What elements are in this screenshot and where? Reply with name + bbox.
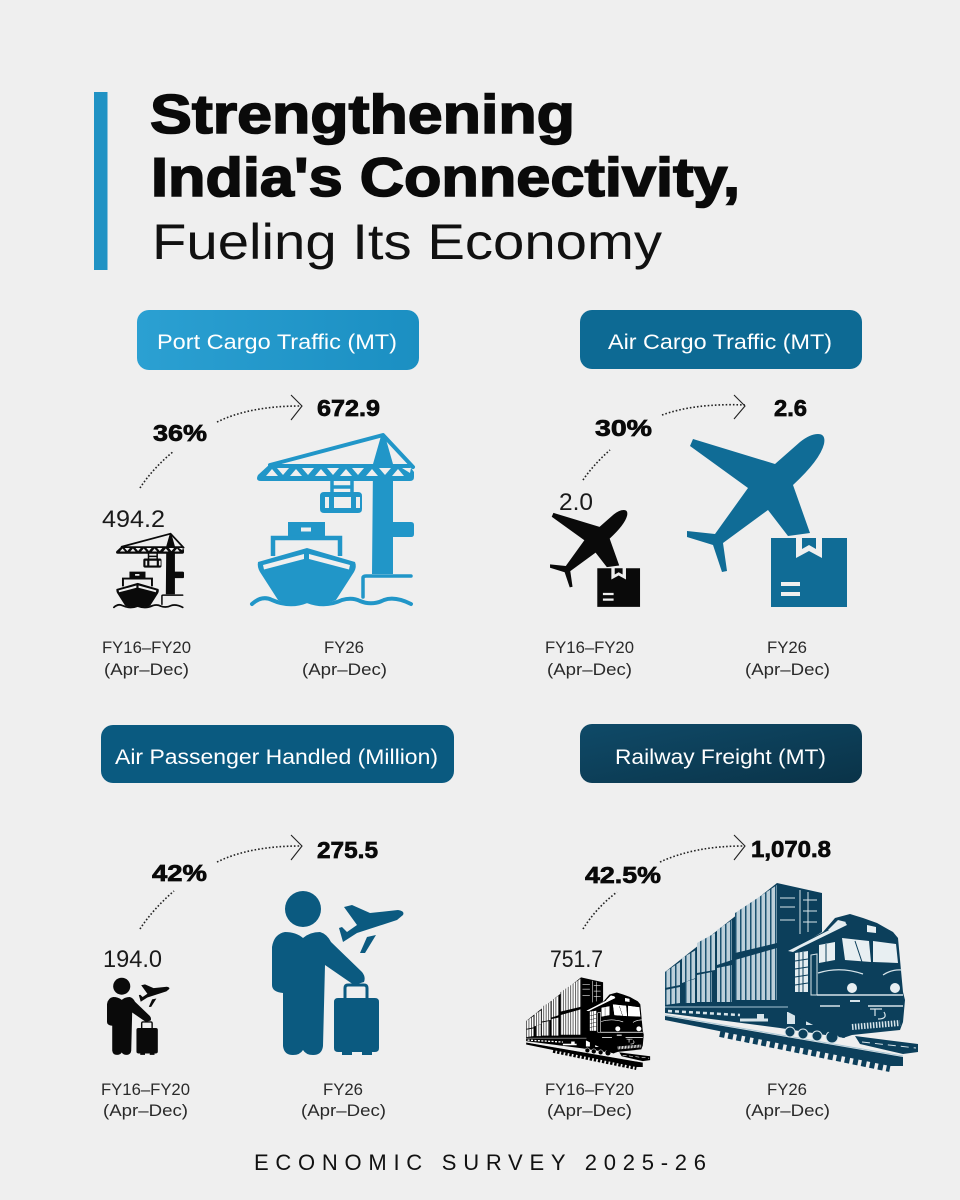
panel: air cargo traffic [545,310,862,679]
label: FY26: (Apr–Dec) [302,660,387,679]
label: FY26 [745,1080,830,1120]
label: FY16-FY20: FY16–FY20 [101,1080,190,1099]
heading pill: port cargo traffic: Port Cargo Traffic (MT) [157,331,397,354]
icon: small passenger [107,978,169,1055]
label: FY16-FY20: (Apr–Dec) [103,1101,188,1120]
title: Strengthening [150,83,575,145]
label: FY26 [301,1080,386,1120]
label: FY16-FY20: FY16–FY20 [545,638,634,657]
heading pill: air cargo traffic: Air Cargo Traffic (MT) [608,331,832,354]
title: Fueling Its Economy [152,214,662,270]
value: 1,070.8: 1,070.8 [751,836,831,862]
value: 2.0: 2.0 [559,489,593,516]
value: 194.0: 194.0 [103,946,162,973]
growth arrow: 42.5% [583,835,745,929]
icon: large crane and ship [252,434,414,604]
growth arrow: 30%: 30% [595,415,652,441]
label: FY26: FY26 [767,638,807,657]
label: FY26: FY26 [324,638,364,657]
label: FY16-FY20 [102,638,191,679]
label: FY26 [745,638,830,679]
growth arrow: 42%: 42% [152,860,207,886]
label: FY16-FY20: FY16–FY20 [545,1080,634,1099]
value: 672.9: 672.9 [317,395,380,421]
label: FY16-FY20: FY16–FY20 [102,638,191,657]
label: FY16-FY20: (Apr–Dec) [547,660,632,679]
label: FY26: FY26 [767,1080,807,1099]
value: 494.2: 494.2 [102,506,165,533]
label: FY26: (Apr–Dec) [301,1101,386,1120]
growth arrow: 36%: 36% [153,420,207,446]
label: FY16-FY20 [101,1080,190,1120]
heading pill: railway freight [580,724,862,783]
label: FY16-FY20: (Apr–Dec) [104,660,189,679]
icon: large plane with parcel [687,434,847,607]
icon: small freight train [526,977,650,1068]
label: FY26 [302,638,387,679]
value: 751.7: 751.7 [550,946,603,973]
icon: large freight train [665,883,918,1068]
panel: air passenger handled [101,725,454,1120]
label: FY16-FY20 [545,1080,634,1120]
growth arrow: 30% [583,395,745,480]
heading pill: air passenger handled: Air Passenger Handled (Million) [115,746,438,769]
footer source: ECONOMIC SURVEY 2025-26 [254,1150,706,1175]
panel: railway freight [526,724,918,1120]
label: FY26: FY26 [323,1080,363,1099]
icon: small plane with parcel [550,510,640,607]
value: 2.6: 2.6 [774,395,807,421]
label: FY16-FY20: (Apr–Dec) [547,1101,632,1120]
icon: large passenger [272,891,403,1055]
title [150,83,740,270]
title accent bar [94,92,108,270]
label: FY16-FY20 [545,638,634,679]
growth arrow: 42% [140,835,302,929]
heading pill: railway freight: Railway Freight (MT) [615,746,826,769]
label: FY26: (Apr–Dec) [745,1101,830,1120]
growth arrow: 36% [140,395,302,488]
value: 275.5: 275.5 [317,837,378,863]
title: India's Connectivity, [151,146,740,208]
growth arrow: 42.5%: 42.5% [585,862,661,888]
icon: small crane and ship [114,533,184,607]
heading pill: air passenger handled [101,725,454,783]
heading pill: port cargo traffic [137,310,419,370]
panel: port cargo traffic [102,310,419,679]
label: FY26: (Apr–Dec) [745,660,830,679]
heading pill: air cargo traffic [580,310,862,369]
